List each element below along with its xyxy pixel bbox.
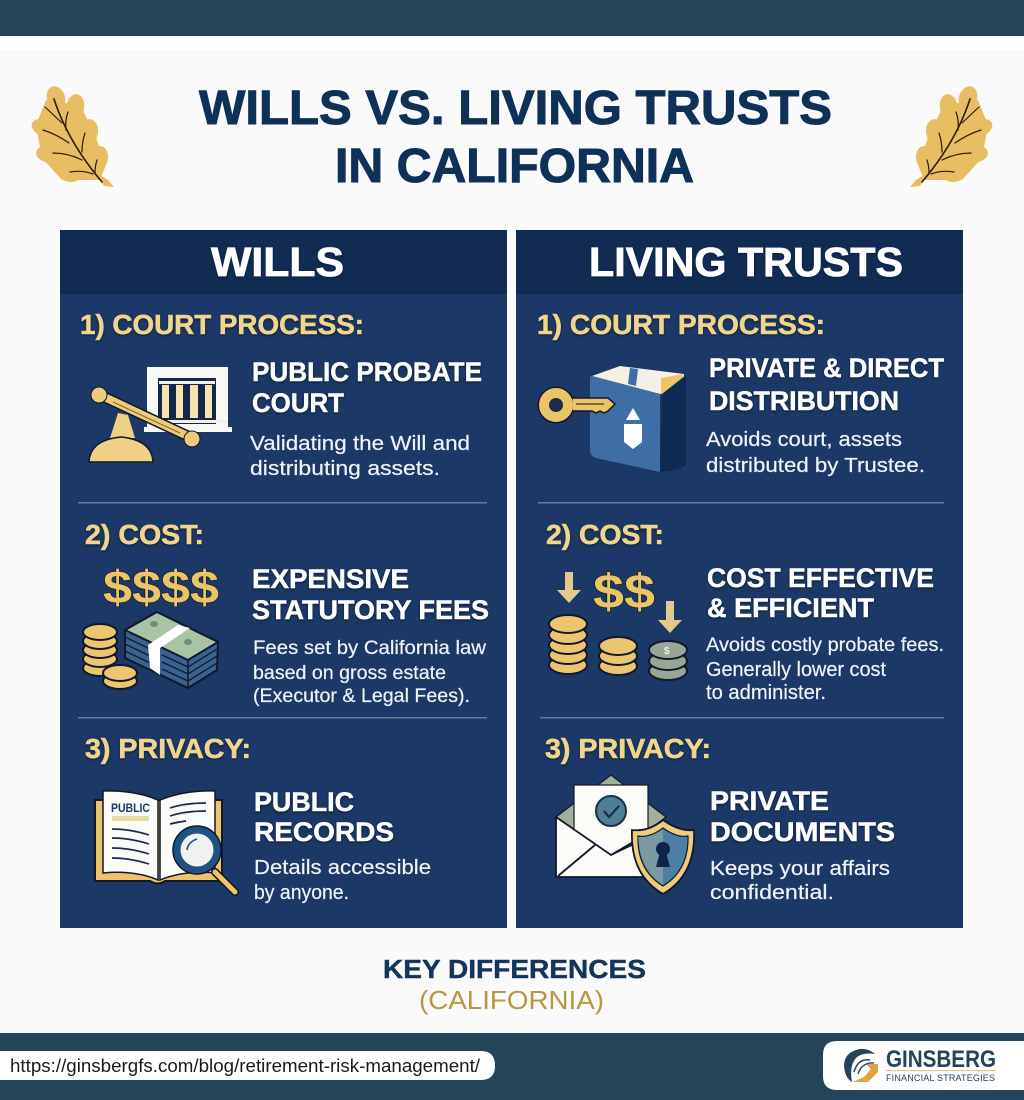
text: private documents: confidential. (710, 881, 834, 904)
title: IN CALIFORNIA (335, 140, 694, 193)
section heading: court process: 1) COURT PROCESS: (537, 309, 825, 340)
title: WILLS VS. LIVING TRUSTS (199, 82, 832, 135)
url pill: https://ginsbergfs.com/blog/retirement-risk-management/ (10, 1056, 480, 1076)
panel: living trusts (516, 230, 963, 928)
text: private documents: Keeps your affairs (710, 857, 890, 880)
icon: envelope and shield (556, 775, 694, 894)
text: expensive statutory fees (252, 564, 489, 707)
heading band: living trusts (516, 230, 963, 294)
text: public records: PUBLIC (254, 787, 354, 817)
section heading: cost: 2) COST: (85, 519, 204, 550)
title (199, 82, 832, 193)
text: expensive statutory fees: EXPENSIVE (252, 564, 409, 594)
text: public probate court: Validating the Will and (250, 432, 470, 455)
text: private and direct distribution (706, 353, 944, 477)
top bar (0, 0, 1024, 36)
text: public probate court: distributing assets. (250, 457, 440, 480)
text: private and direct distribution: PRIVATE & DIRECT (709, 353, 944, 383)
icon: key and trust binder (544, 366, 686, 472)
text: public records: RECORDS (254, 817, 394, 847)
text: cost effective and efficient: to administer. (706, 681, 826, 704)
icon: arrows, dollars and coin stacks: $ (664, 646, 670, 657)
heading band: wills (60, 230, 507, 294)
text: cost effective and efficient (706, 563, 944, 704)
icon: arrows, dollars and coin stacks: $$ (593, 566, 655, 619)
logo: ginsberg financial strategies: FINANCIAL STRATEGIES (886, 1073, 995, 1083)
text: private and direct distribution: Avoids court, assets (706, 428, 902, 451)
text: private and direct distribution: DISTRIBUTION (709, 386, 899, 416)
icon: dollars, coins and cash (83, 561, 219, 689)
panel body: wills (60, 230, 507, 928)
icon: open book and magnifier: PUBLIC (111, 803, 150, 815)
caption: key differences: KEY DIFFERENCES (383, 954, 646, 984)
text: public probate court: COURT (252, 388, 344, 418)
icon: logo mark (844, 1049, 878, 1082)
panel: wills (60, 230, 507, 928)
text: private documents: PRIVATE (710, 786, 829, 816)
text: private and direct distribution: distributed by Trustee. (706, 454, 925, 477)
section heading: court process: 1) COURT PROCESS: (80, 309, 364, 340)
text: cost effective and efficient: COST EFFECTIVE (707, 563, 934, 593)
section heading: privacy: 3) PRIVACY: (545, 733, 711, 764)
panel body: living trusts (516, 230, 963, 928)
heading: living trusts: LIVING TRUSTS (589, 239, 903, 285)
icon: left oak leaf (29, 84, 114, 187)
section heading: cost: 2) COST: (546, 519, 664, 550)
text: public records: by anyone. (254, 881, 349, 904)
caption: key differences (383, 954, 646, 1015)
text: cost effective and efficient: Avoids costly probate fees. (706, 635, 944, 656)
text: public records (254, 787, 431, 904)
logo: ginsberg financial strategies: GINSBERG (886, 1046, 996, 1073)
heading: wills: WILLS (211, 239, 344, 285)
text: public probate court (250, 357, 482, 480)
caption: key differences: (CALIFORNIA) (419, 985, 604, 1015)
icon: arrows, dollars and coin stacks (549, 566, 687, 680)
text: private documents (710, 786, 895, 904)
icon: open book and magnifier (95, 791, 235, 892)
text: expensive statutory fees: (Executor & Legal Fees). (253, 686, 470, 707)
logo: ginsberg financial strategies (823, 1041, 1024, 1090)
text: expensive statutory fees: Fees set by California law (253, 638, 486, 659)
text: private documents: DOCUMENTS (710, 817, 895, 847)
section heading: privacy: 3) PRIVACY: (85, 733, 251, 764)
text: public probate court: PUBLIC PROBATE (252, 357, 482, 387)
icon: courthouse and gavel (89, 367, 232, 462)
icon: right oak leaf (910, 84, 995, 187)
bottom bar (0, 1033, 1024, 1100)
url pill (0, 1051, 495, 1080)
text: expensive statutory fees: STATUTORY FEES (252, 595, 489, 625)
icon: dollars, coins and cash: $$$$ (103, 561, 219, 613)
text: expensive statutory fees: based on gross estate (253, 663, 446, 684)
text: cost effective and efficient: Generally lower cost (706, 658, 886, 681)
text: public records: Details accessible (254, 856, 431, 879)
text: cost effective and efficient: & EFFICIENT (707, 593, 875, 623)
